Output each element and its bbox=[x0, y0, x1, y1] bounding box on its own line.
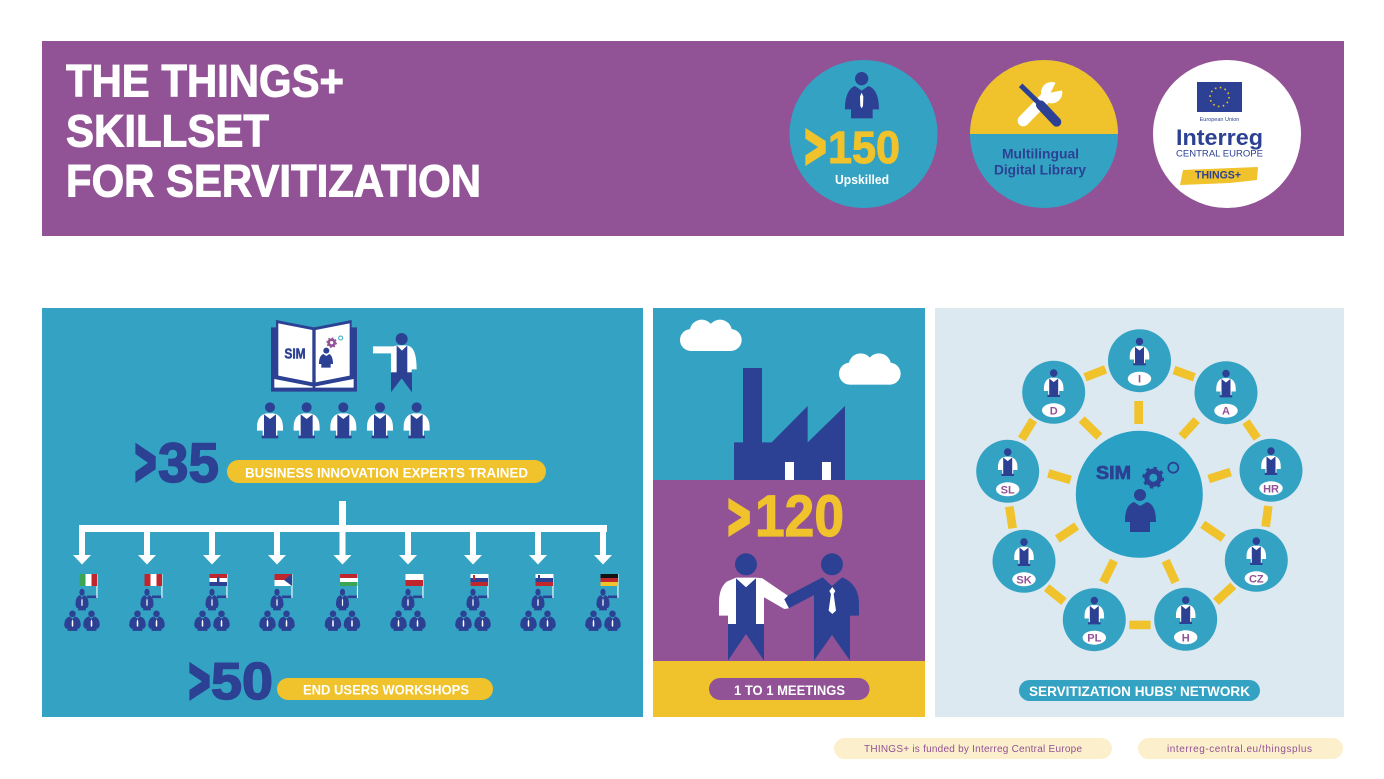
badge: over 150 upskilled bbox=[790, 60, 938, 208]
title: THE THINGS+ bbox=[66, 56, 344, 107]
pill: 1 to 1 meetings: 1 TO 1 MEETINGS bbox=[734, 683, 845, 698]
stat: >150 bbox=[805, 114, 900, 180]
country groups with flags bbox=[64, 574, 621, 631]
text: interreg: Interreg bbox=[1176, 125, 1263, 150]
group: Germany bbox=[585, 574, 621, 631]
label: multilingual digital library: Digital Library bbox=[994, 162, 1086, 178]
hub: SL bbox=[976, 440, 1039, 503]
icon: teacher pointing bbox=[373, 333, 417, 392]
title bbox=[66, 56, 481, 207]
pill: end users workshops: END USERS WORKSHOPS bbox=[303, 682, 469, 698]
hub: I: I bbox=[1138, 374, 1141, 386]
footer note: funding bbox=[834, 738, 1112, 759]
group: Poland bbox=[390, 574, 426, 631]
pill: servitization hubs network: SERVITIZATION HUBS’ NETWORK bbox=[1029, 684, 1250, 699]
brush: things+: THINGS+ bbox=[1195, 170, 1241, 182]
hub: A bbox=[1194, 361, 1258, 424]
icon: clouds bbox=[680, 320, 901, 385]
icon: handshake bbox=[719, 553, 859, 661]
footer note: funding: THINGS+ is funded by Interreg Central Europe bbox=[864, 744, 1082, 755]
hub: HR: HR bbox=[1263, 483, 1279, 495]
panel: servitization hubs network bbox=[935, 308, 1344, 717]
trainees bbox=[257, 402, 430, 438]
group: Hungary bbox=[325, 574, 360, 631]
group: Czech Republic bbox=[259, 574, 295, 631]
group: Slovakia bbox=[455, 574, 491, 631]
badge: interreg logo bbox=[1153, 60, 1301, 208]
footer note: website: interreg-central.eu/thingsplus bbox=[1167, 744, 1312, 755]
hub: PL bbox=[1063, 588, 1126, 651]
hub: H: H bbox=[1182, 632, 1190, 644]
hub: D: D bbox=[1050, 405, 1058, 417]
group: Italy bbox=[64, 574, 100, 631]
hub: PL: PL bbox=[1087, 633, 1102, 645]
label: multilingual digital library: Multilingual bbox=[1002, 146, 1079, 162]
brush: things+ bbox=[1180, 167, 1258, 185]
title: FOR SERVITIZATION bbox=[66, 156, 481, 207]
hub: CZ: CZ bbox=[1249, 573, 1264, 585]
hub: CZ bbox=[1225, 529, 1288, 592]
panel: trained experts and workshops bbox=[42, 308, 643, 717]
pill: servitization hubs network bbox=[1019, 680, 1260, 701]
stat: >120: 120 bbox=[755, 484, 844, 549]
stat: >35: > bbox=[135, 427, 156, 499]
hub: I bbox=[1108, 329, 1171, 392]
label: upskilled: Upskilled bbox=[835, 172, 889, 187]
panel: one to one meetings bbox=[653, 308, 925, 717]
hub: SIM centre: SIM bbox=[1096, 463, 1131, 483]
icon: wrench and screwdriver bbox=[1021, 79, 1067, 122]
stat: >120: > bbox=[728, 481, 750, 551]
hub: H bbox=[1154, 588, 1217, 651]
badge: multilingual digital library bbox=[970, 60, 1118, 208]
footer note: website bbox=[1138, 738, 1343, 759]
stat: >150: > bbox=[805, 114, 826, 180]
title: SKILLSET bbox=[66, 106, 269, 157]
label: multilingual digital library bbox=[994, 146, 1086, 178]
stat: >150: 150 bbox=[828, 122, 900, 173]
stat: >50: > bbox=[189, 646, 210, 715]
hub: SK: SK bbox=[1016, 574, 1032, 586]
group: Slovenia bbox=[520, 574, 556, 631]
hub: A: A bbox=[1222, 406, 1230, 418]
hub: SK bbox=[992, 530, 1056, 593]
arrow tree bbox=[73, 501, 612, 564]
pill: business innovation experts trained bbox=[227, 460, 546, 483]
hub: SL: SL bbox=[1001, 484, 1015, 496]
icon: SIM book: SIM bbox=[284, 346, 306, 362]
text: european union: European Union bbox=[1200, 117, 1239, 123]
group: Croatia bbox=[194, 574, 230, 631]
pill: end users workshops bbox=[277, 678, 493, 700]
stat: >35 bbox=[135, 427, 219, 499]
hub: HR bbox=[1240, 439, 1302, 502]
group: Austria bbox=[129, 574, 165, 631]
pill: business innovation experts trained: BUSINESS INNOVATION EXPERTS TRAINED bbox=[245, 465, 528, 481]
pill: 1 to 1 meetings bbox=[709, 678, 870, 700]
hub: D bbox=[1022, 361, 1085, 424]
text: central europe: CENTRAL EUROPE bbox=[1176, 149, 1263, 160]
stat: >50 bbox=[189, 646, 273, 715]
network connectors bbox=[1009, 369, 1268, 625]
icon: EU flag bbox=[1197, 82, 1242, 112]
hub: SIM centre bbox=[1076, 431, 1203, 558]
header banner bbox=[42, 41, 1344, 236]
icon: factory bbox=[734, 368, 845, 480]
stat: >50: 50 bbox=[211, 653, 273, 711]
stat: >35: 35 bbox=[158, 431, 219, 494]
stat: >120 bbox=[728, 481, 844, 551]
icon: person with tie bbox=[845, 72, 879, 118]
icon: SIM book bbox=[271, 320, 357, 392]
